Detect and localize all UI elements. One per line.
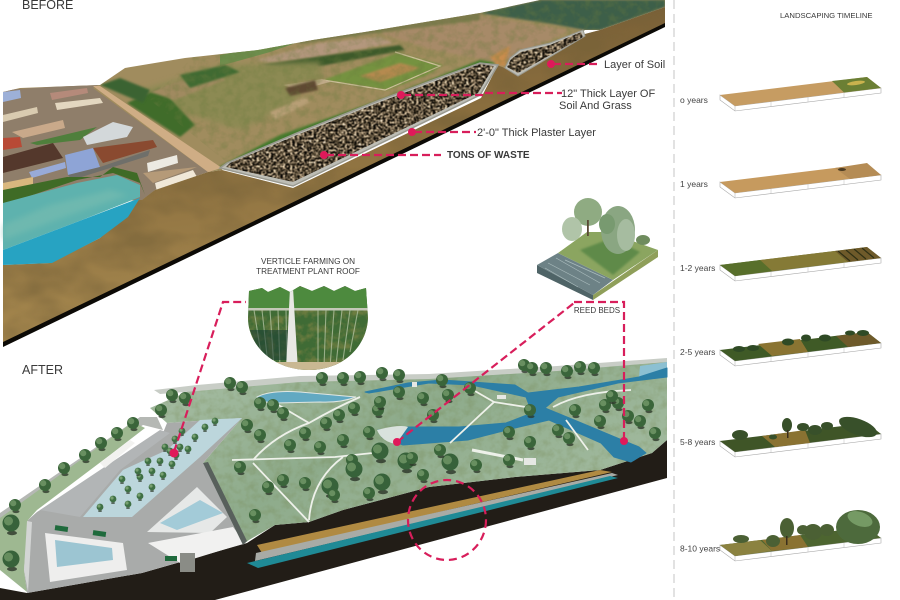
- heading: after: AFTER: [22, 363, 63, 377]
- leader: vertical farming to plant: [170, 302, 246, 458]
- timeline stage: 1 year: [680, 163, 881, 198]
- timeline stage: 2-5 years: 2-5 years: [680, 347, 715, 357]
- inset: reed beds: [537, 198, 658, 315]
- timeline stage: 1-2 years: [680, 247, 881, 281]
- timeline stage: 0 years: o years: [680, 95, 708, 105]
- callout: soil and grass layer: [397, 88, 655, 112]
- timeline heading: LANDSCAPING TIMELINE: [780, 11, 873, 20]
- small park buildings: [412, 382, 536, 465]
- trees: [2, 359, 661, 571]
- treatment plant: [24, 418, 247, 593]
- dashed divider between site sections and timeline: [673, 0, 675, 600]
- timeline stage: 1-2 years: 1-2 years: [680, 263, 715, 273]
- panel: after site section: [0, 358, 667, 600]
- road edge along top of park: [154, 358, 667, 394]
- callout: plaster layer: 2'-0" Thick Plaster Layer: [477, 127, 596, 139]
- callout: tons of waste: TONS OF WASTE: [447, 150, 530, 161]
- soil cross-section: [3, 7, 665, 347]
- callout: soil and grass layer: 12" Thick Layer OF: [561, 88, 655, 100]
- callout: layer of soil: Layer of Soil: [604, 59, 665, 71]
- park surface: [150, 360, 667, 543]
- inset heading: VERTICLE FARMING ON: [261, 257, 355, 266]
- dashed ellipse highlighting underground layers: [408, 480, 486, 560]
- timeline stage: 1 year: 1 years: [680, 179, 708, 189]
- lake: [3, 175, 140, 265]
- underground water and soil layers: [247, 470, 618, 568]
- park paths: [232, 387, 631, 522]
- timeline stage: 5-8 years: 5-8 years: [680, 437, 715, 447]
- panel: before site section: [0, 0, 665, 347]
- callout: plaster layer: [408, 127, 596, 139]
- timeline stage: 8-10 years: [680, 508, 881, 561]
- circular farm image: [248, 286, 368, 370]
- greenhouse planting: [97, 418, 218, 512]
- timeline stage: 8-10 years: 8-10 years: [680, 544, 720, 554]
- waste layer cut, small: [505, 30, 585, 76]
- dark ground base: [0, 440, 667, 600]
- callout: tons of waste: [320, 150, 530, 161]
- callout: layer of soil: [547, 59, 665, 71]
- inset heading: [256, 257, 360, 276]
- water bodies: [257, 362, 667, 462]
- isometric block with trees: [537, 198, 658, 300]
- inset caption: REED BEDS: [574, 306, 620, 315]
- inset: vertical farming: [245, 257, 370, 375]
- callout: soil and grass layer: Soil And Grass: [559, 100, 632, 112]
- inset heading: TREATMENT PLANT ROOF: [256, 267, 360, 276]
- timeline stage: 0 years: [680, 77, 881, 111]
- leader: reed beds to wetland: [393, 303, 574, 446]
- leader: reed beds to river outlet: [574, 302, 628, 445]
- timeline stage: 2-5 years: [680, 330, 881, 366]
- left planted road strip: [0, 417, 163, 592]
- waste layer cut, large: [220, 63, 498, 186]
- timeline stage: 5-8 years: [680, 413, 881, 457]
- aerial photo surface of the landfill: [0, 0, 665, 205]
